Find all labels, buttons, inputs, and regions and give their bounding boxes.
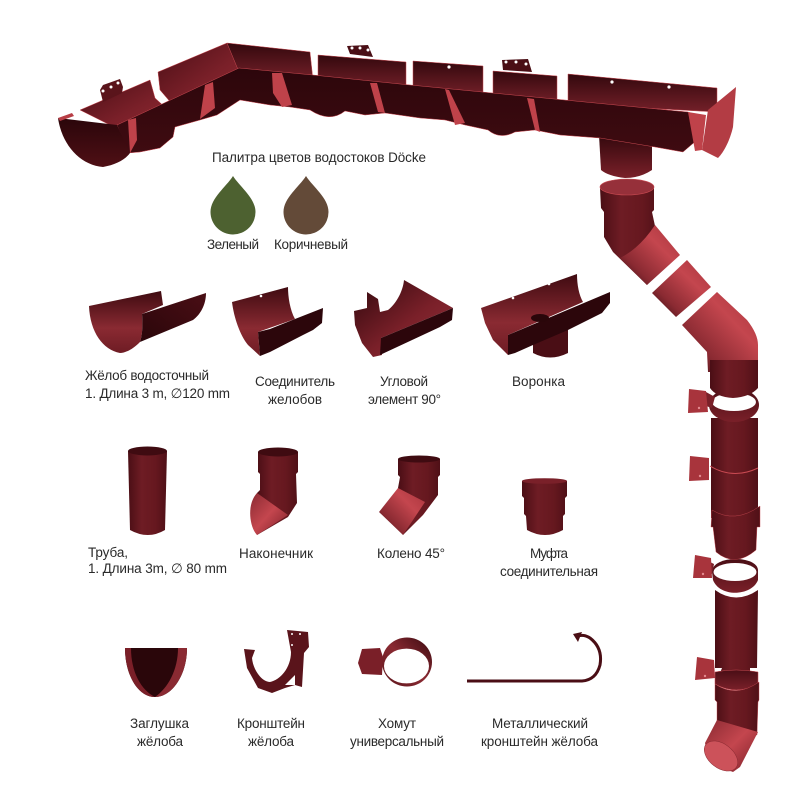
gaps at the lower clamp: [713, 668, 758, 675]
gutter system: horizontal assembled gutter: [58, 43, 736, 178]
brown colour swatch: Коричневый: [274, 237, 348, 252]
right end cap: [702, 87, 736, 158]
pipe 3: [715, 590, 758, 674]
ring clamp 1: [688, 388, 759, 422]
coupling: [711, 506, 760, 560]
bracket plate 1: [100, 79, 123, 102]
bracket plate 3: [502, 59, 532, 72]
palette heading: Палитра цветов водостоков Döcke: [212, 150, 426, 165]
downpipe: coupling and elbows: [600, 179, 758, 372]
part: metal gutter bracket: кронштейн жёлоба: [481, 734, 598, 749]
part: pipe: Труба,: [88, 545, 128, 560]
pipe 2: [711, 418, 758, 518]
elbow upper: [600, 186, 660, 285]
part: gutter: [85, 291, 230, 401]
lower clamp band: [715, 670, 758, 690]
clamp block 4: [695, 657, 715, 680]
downpipe: vertical pipe with clamps: [688, 360, 760, 777]
clamp block 2: [689, 456, 709, 481]
part: pipe end piece: [239, 448, 313, 561]
part: gutter bracket: жёлоба: [248, 734, 294, 749]
bracket plate 2: [347, 45, 373, 57]
gutter back walls: [80, 43, 717, 130]
part: pipe end piece: Наконечник: [239, 546, 313, 561]
part: funnel: Воронка: [512, 374, 565, 389]
outlet end face: [699, 735, 743, 777]
part: universal clamp: универсальный: [350, 734, 444, 749]
part: metal gutter bracket: Металлический: [492, 716, 588, 731]
green colour swatch: Зеленый: [207, 237, 259, 252]
part: universal clamp: Хомут: [378, 716, 416, 731]
part: universal clamp: [350, 637, 444, 749]
part: end cap: [125, 648, 189, 749]
left lip: [58, 113, 74, 121]
part: gutter connector: Соединитель: [255, 374, 335, 389]
pipe top: [710, 360, 758, 398]
ring clamp 3: [693, 555, 758, 593]
part: corner element: [354, 280, 453, 407]
part: corner element: Угловой: [380, 374, 428, 389]
part: knee 45: Колено 45°: [377, 546, 445, 561]
part: coupling: Муфта: [530, 546, 568, 561]
part: knee 45: [377, 456, 445, 561]
pipe elbow 3: [682, 292, 758, 372]
part: gutter connector: [232, 287, 335, 407]
funnel neck: [599, 135, 652, 178]
band 2: [710, 466, 758, 474]
part: gutter connector: желобов: [268, 392, 322, 407]
part: metal gutter bracket: [467, 632, 601, 749]
part: corner element: элемент 90°: [368, 392, 441, 407]
bottom pipe with rim: [715, 682, 759, 735]
green colour swatch: [207, 176, 259, 252]
part: pipe: [88, 446, 227, 576]
part: gutter: 1. Длина 3 m, ∅120 mm: [85, 386, 230, 401]
part: end cap: Заглушка: [130, 716, 189, 731]
gutter clips: [128, 73, 706, 153]
left end cap: [58, 118, 130, 167]
elbow lighter lower section: [620, 225, 680, 285]
part: gutter: Жёлоб водосточный: [85, 368, 209, 383]
bottom outlet: [705, 720, 758, 772]
brown colour swatch: [274, 176, 348, 252]
part: gutter bracket: [237, 630, 309, 749]
part: pipe: 1. Длина 3m, ∅ 80 mm: [88, 561, 227, 576]
part: funnel: [481, 274, 610, 389]
coupling rim: [600, 179, 654, 195]
screw holes: [447, 65, 671, 89]
part: coupling: [500, 478, 598, 579]
gutter front wall: [117, 68, 703, 153]
part: gutter bracket: Кронштейн: [237, 716, 305, 731]
part: coupling: соединительная: [500, 564, 598, 579]
pipe segment 2: [652, 260, 711, 317]
part: end cap: жёлоба: [137, 734, 183, 749]
